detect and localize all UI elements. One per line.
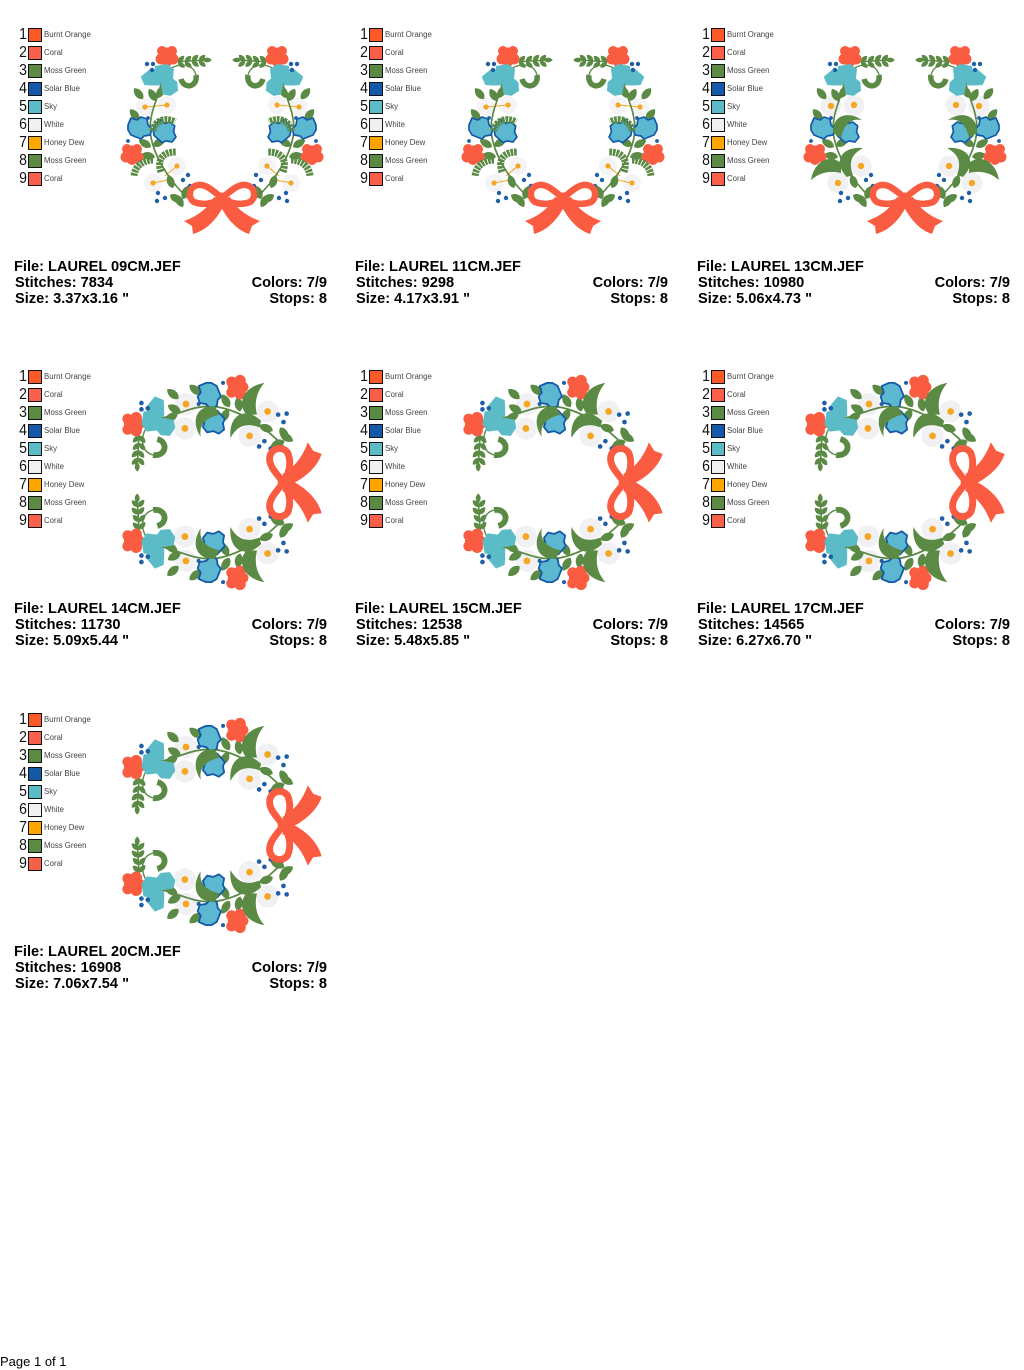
color legend: LAUREL 15CM bbox=[360, 368, 432, 529]
file details: LAUREL 20CM: File: LAUREL 20CM.JEF bbox=[14, 944, 181, 960]
color legend: LAUREL 15CM: 5 bbox=[360, 440, 368, 457]
color legend: LAUREL 20CM: 9 bbox=[19, 855, 27, 872]
color legend: LAUREL 20CM: Honey Dew bbox=[44, 823, 84, 832]
file details: LAUREL 11CM: Colors: 7/9 bbox=[593, 275, 668, 291]
panel: LAUREL 13CM bbox=[697, 26, 1010, 307]
color legend: LAUREL 11CM: Moss Green bbox=[385, 66, 427, 75]
color legend: LAUREL 15CM: Honey Dew bbox=[385, 480, 425, 489]
color legend: LAUREL 09CM: 6 bbox=[19, 116, 27, 133]
color legend: LAUREL 15CM: 6 bbox=[360, 458, 368, 475]
color legend: LAUREL 20CM: 7 bbox=[19, 819, 27, 836]
color legend: LAUREL 09CM: 2 bbox=[19, 44, 27, 61]
color legend: LAUREL 14CM: 7 bbox=[19, 476, 27, 493]
color legend: LAUREL 09CM: Sky bbox=[44, 102, 57, 111]
color legend: LAUREL 15CM: White bbox=[385, 462, 405, 471]
color legend: LAUREL 20CM: 3 bbox=[19, 747, 27, 764]
color legend: LAUREL 15CM: Burnt Orange bbox=[385, 372, 432, 381]
file details: LAUREL 17CM: File: LAUREL 17CM.JEF bbox=[697, 601, 864, 617]
color legend: LAUREL 17CM: 6 bbox=[702, 458, 710, 475]
color legend: LAUREL 15CM: 9 bbox=[360, 512, 368, 529]
color legend: LAUREL 14CM: White bbox=[44, 462, 64, 471]
color legend: LAUREL 17CM bbox=[702, 368, 774, 529]
color legend: LAUREL 11CM: 3 bbox=[360, 62, 368, 79]
file details: LAUREL 17CM: Stops: 8 bbox=[952, 633, 1010, 649]
color legend: LAUREL 20CM: Burnt Orange bbox=[44, 715, 91, 724]
color legend: LAUREL 20CM: 1 bbox=[19, 711, 27, 728]
file details: LAUREL 17CM: Colors: 7/9 bbox=[935, 617, 1010, 633]
color legend: LAUREL 09CM: Honey Dew bbox=[44, 138, 84, 147]
file details: LAUREL 20CM: Colors: 7/9 bbox=[252, 960, 327, 976]
color legend: LAUREL 13CM: Moss Green bbox=[727, 66, 769, 75]
color legend: LAUREL 15CM: Coral bbox=[385, 516, 404, 525]
color legend: LAUREL 15CM: 2 bbox=[360, 386, 368, 403]
color legend: LAUREL 13CM: 1 bbox=[702, 26, 710, 43]
file details: LAUREL 13CM: File: LAUREL 13CM.JEF bbox=[697, 259, 864, 275]
file details: LAUREL 17CM: Stitches: 14565 bbox=[698, 617, 804, 633]
color legend: LAUREL 09CM: 7 bbox=[19, 134, 27, 151]
color legend: LAUREL 13CM: Coral bbox=[727, 48, 746, 57]
color legend: LAUREL 13CM: 4 bbox=[702, 80, 710, 97]
color legend: LAUREL 11CM: Honey Dew bbox=[385, 138, 425, 147]
color legend: LAUREL 11CM: White bbox=[385, 120, 405, 129]
color legend: LAUREL 11CM: 4 bbox=[360, 80, 368, 97]
color legend: LAUREL 11CM: Sky bbox=[385, 102, 398, 111]
file details: LAUREL 09CM: Colors: 7/9 bbox=[252, 275, 327, 291]
color legend: LAUREL 13CM: 8 bbox=[702, 152, 710, 169]
file details: LAUREL 09CM: Size: 3.37x3.16 " bbox=[15, 291, 129, 307]
wreath: LAUREL 11CM bbox=[462, 46, 664, 234]
color legend: LAUREL 14CM: Moss Green bbox=[44, 408, 86, 417]
color legend: LAUREL 20CM: Moss Green bbox=[44, 751, 86, 760]
wreath: LAUREL 13CM bbox=[804, 46, 1006, 234]
file details: LAUREL 14CM: File: LAUREL 14CM.JEF bbox=[14, 601, 181, 617]
file details: LAUREL 15CM: Stops: 8 bbox=[610, 633, 668, 649]
color legend: LAUREL 09CM bbox=[19, 26, 91, 187]
file details: LAUREL 17CM: Size: 6.27x6.70 " bbox=[698, 633, 812, 649]
file details: LAUREL 11CM: Size: 4.17x3.91 " bbox=[356, 291, 470, 307]
color legend: LAUREL 11CM: 6 bbox=[360, 116, 368, 133]
color legend: LAUREL 17CM: Sky bbox=[727, 444, 740, 453]
color legend: LAUREL 13CM: 3 bbox=[702, 62, 710, 79]
file details: LAUREL 20CM: Stitches: 16908 bbox=[15, 960, 121, 976]
color legend: LAUREL 14CM: Burnt Orange bbox=[44, 372, 91, 381]
color legend: LAUREL 09CM: Coral bbox=[44, 48, 63, 57]
wreath: LAUREL 15CM bbox=[463, 374, 663, 590]
color legend: LAUREL 11CM: Moss Green bbox=[385, 156, 427, 165]
color legend: LAUREL 11CM: Coral bbox=[385, 174, 404, 183]
color legend: LAUREL 17CM: 2 bbox=[702, 386, 710, 403]
color legend: LAUREL 17CM: 1 bbox=[702, 368, 710, 385]
color legend: LAUREL 20CM: 2 bbox=[19, 729, 27, 746]
color legend: LAUREL 14CM: 1 bbox=[19, 368, 27, 385]
color legend: LAUREL 15CM: Moss Green bbox=[385, 408, 427, 417]
color legend: LAUREL 17CM: Coral bbox=[727, 516, 746, 525]
color legend: LAUREL 13CM: White bbox=[727, 120, 747, 129]
color legend: LAUREL 17CM: White bbox=[727, 462, 747, 471]
color legend: LAUREL 20CM bbox=[19, 711, 91, 872]
file details: LAUREL 11CM: File: LAUREL 11CM.JEF bbox=[355, 259, 521, 275]
file details: LAUREL 11CM: Stops: 8 bbox=[610, 291, 668, 307]
color legend: LAUREL 15CM: Sky bbox=[385, 444, 398, 453]
file details: LAUREL 09CM bbox=[14, 259, 327, 307]
file details: LAUREL 20CM: Stops: 8 bbox=[269, 976, 327, 992]
color legend: LAUREL 20CM: White bbox=[44, 805, 64, 814]
panel: LAUREL 15CM bbox=[355, 368, 668, 649]
color legend: LAUREL 14CM: Coral bbox=[44, 390, 63, 399]
color legend: LAUREL 15CM: Solar Blue bbox=[385, 426, 421, 435]
color legend: LAUREL 14CM: 6 bbox=[19, 458, 27, 475]
file details: LAUREL 15CM bbox=[355, 601, 668, 649]
color legend: LAUREL 17CM: Coral bbox=[727, 390, 746, 399]
color legend: LAUREL 13CM: Solar Blue bbox=[727, 84, 763, 93]
file details: LAUREL 09CM: Stitches: 7834 bbox=[15, 275, 113, 291]
panel: LAUREL 09CM bbox=[14, 26, 327, 307]
file details: LAUREL 09CM: File: LAUREL 09CM.JEF bbox=[14, 259, 181, 275]
color legend: LAUREL 11CM: Coral bbox=[385, 48, 404, 57]
color legend: LAUREL 11CM: 2 bbox=[360, 44, 368, 61]
file details: LAUREL 13CM: Colors: 7/9 bbox=[935, 275, 1010, 291]
color legend: LAUREL 13CM: Burnt Orange bbox=[727, 30, 774, 39]
color legend: LAUREL 20CM: 4 bbox=[19, 765, 27, 782]
color legend: LAUREL 14CM: 2 bbox=[19, 386, 27, 403]
color legend: LAUREL 09CM: White bbox=[44, 120, 64, 129]
color legend: LAUREL 17CM: 9 bbox=[702, 512, 710, 529]
color legend: LAUREL 17CM: Moss Green bbox=[727, 408, 769, 417]
file details: LAUREL 11CM bbox=[355, 259, 668, 307]
file details: LAUREL 14CM: Stitches: 11730 bbox=[15, 617, 120, 633]
color legend: LAUREL 15CM: 4 bbox=[360, 422, 368, 439]
color legend: LAUREL 14CM: 5 bbox=[19, 440, 27, 457]
color legend: LAUREL 15CM: 3 bbox=[360, 404, 368, 421]
color legend: LAUREL 14CM: Honey Dew bbox=[44, 480, 84, 489]
color legend: LAUREL 20CM: 8 bbox=[19, 837, 27, 854]
color legend: LAUREL 09CM: Moss Green bbox=[44, 156, 86, 165]
color legend: LAUREL 14CM: 4 bbox=[19, 422, 27, 439]
file details: LAUREL 15CM: Stitches: 12538 bbox=[356, 617, 462, 633]
file details: LAUREL 14CM: Size: 5.09x5.44 " bbox=[15, 633, 129, 649]
color legend: LAUREL 13CM: Sky bbox=[727, 102, 740, 111]
color legend: LAUREL 13CM: 2 bbox=[702, 44, 710, 61]
file details: LAUREL 20CM bbox=[14, 944, 327, 992]
color legend: LAUREL 11CM: 5 bbox=[360, 98, 368, 115]
color legend: LAUREL 15CM: Moss Green bbox=[385, 498, 427, 507]
color legend: LAUREL 14CM: 3 bbox=[19, 404, 27, 421]
color legend: LAUREL 14CM: 8 bbox=[19, 494, 27, 511]
color legend: LAUREL 13CM: 9 bbox=[702, 170, 710, 187]
color legend: LAUREL 11CM: 8 bbox=[360, 152, 368, 169]
file details: LAUREL 14CM: Stops: 8 bbox=[269, 633, 327, 649]
color legend: LAUREL 20CM: Coral bbox=[44, 859, 63, 868]
color legend: LAUREL 20CM: Sky bbox=[44, 787, 57, 796]
file details: LAUREL 15CM: File: LAUREL 15CM.JEF bbox=[355, 601, 522, 617]
color legend: LAUREL 09CM: 5 bbox=[19, 98, 27, 115]
color legend: LAUREL 20CM: 5 bbox=[19, 783, 27, 800]
file details: LAUREL 09CM: Stops: 8 bbox=[269, 291, 327, 307]
color legend: LAUREL 14CM: 9 bbox=[19, 512, 27, 529]
color legend: LAUREL 11CM: 9 bbox=[360, 170, 368, 187]
color legend: LAUREL 13CM: Coral bbox=[727, 174, 746, 183]
color legend: LAUREL 09CM: 8 bbox=[19, 152, 27, 169]
color legend: LAUREL 09CM: 1 bbox=[19, 26, 27, 43]
color legend: LAUREL 13CM: 6 bbox=[702, 116, 710, 133]
page footer: Page 1 of 1 bbox=[0, 1354, 66, 1369]
color legend: LAUREL 17CM: Honey Dew bbox=[727, 480, 767, 489]
color legend: LAUREL 17CM: 7 bbox=[702, 476, 710, 493]
color legend: LAUREL 17CM: 8 bbox=[702, 494, 710, 511]
color legend: LAUREL 14CM bbox=[19, 368, 91, 529]
file details: LAUREL 15CM: Size: 5.48x5.85 " bbox=[356, 633, 470, 649]
panel: LAUREL 20CM bbox=[14, 711, 327, 992]
color legend: LAUREL 17CM: Moss Green bbox=[727, 498, 769, 507]
color legend: LAUREL 13CM bbox=[702, 26, 774, 187]
file details: LAUREL 13CM: Stitches: 10980 bbox=[698, 275, 804, 291]
color legend: LAUREL 15CM: Coral bbox=[385, 390, 404, 399]
color legend: LAUREL 15CM: 1 bbox=[360, 368, 368, 385]
color legend: LAUREL 11CM: 1 bbox=[360, 26, 368, 43]
color legend: LAUREL 14CM: Moss Green bbox=[44, 498, 86, 507]
color legend: LAUREL 14CM: Solar Blue bbox=[44, 426, 80, 435]
color legend: LAUREL 20CM: 6 bbox=[19, 801, 27, 818]
wreath: LAUREL 14CM bbox=[122, 374, 322, 590]
color legend: LAUREL 17CM: 5 bbox=[702, 440, 710, 457]
color legend: LAUREL 09CM: Burnt Orange bbox=[44, 30, 91, 39]
panel: LAUREL 14CM bbox=[14, 368, 327, 649]
file details: LAUREL 11CM: Stitches: 9298 bbox=[356, 275, 454, 291]
color legend: LAUREL 13CM: 5 bbox=[702, 98, 710, 115]
color legend: LAUREL 17CM: 4 bbox=[702, 422, 710, 439]
color legend: LAUREL 11CM bbox=[360, 26, 432, 187]
file details: LAUREL 13CM: Stops: 8 bbox=[952, 291, 1010, 307]
color legend: LAUREL 20CM: Solar Blue bbox=[44, 769, 80, 778]
color legend: LAUREL 09CM: 3 bbox=[19, 62, 27, 79]
wreath: LAUREL 17CM bbox=[805, 374, 1005, 590]
color legend: LAUREL 11CM: Solar Blue bbox=[385, 84, 421, 93]
file details: LAUREL 17CM bbox=[697, 601, 1010, 649]
color legend: LAUREL 11CM: Burnt Orange bbox=[385, 30, 432, 39]
color legend: LAUREL 17CM: Burnt Orange bbox=[727, 372, 774, 381]
color legend: LAUREL 15CM: 8 bbox=[360, 494, 368, 511]
color legend: LAUREL 09CM: Moss Green bbox=[44, 66, 86, 75]
wreath: LAUREL 09CM bbox=[120, 46, 324, 234]
color legend: LAUREL 09CM: Solar Blue bbox=[44, 84, 80, 93]
color legend: LAUREL 13CM: Honey Dew bbox=[727, 138, 767, 147]
color legend: LAUREL 17CM: Solar Blue bbox=[727, 426, 763, 435]
file details: LAUREL 13CM: Size: 5.06x4.73 " bbox=[698, 291, 812, 307]
color legend: LAUREL 15CM: 7 bbox=[360, 476, 368, 493]
color legend: LAUREL 09CM: 9 bbox=[19, 170, 27, 187]
file details: LAUREL 14CM: Colors: 7/9 bbox=[252, 617, 327, 633]
panel: LAUREL 17CM bbox=[697, 368, 1010, 649]
file details: LAUREL 14CM bbox=[14, 601, 327, 649]
file details: LAUREL 13CM bbox=[697, 259, 1010, 307]
color legend: LAUREL 09CM: 4 bbox=[19, 80, 27, 97]
color legend: LAUREL 13CM: Moss Green bbox=[727, 156, 769, 165]
file details: LAUREL 20CM: Size: 7.06x7.54 " bbox=[15, 976, 129, 992]
color legend: LAUREL 20CM: Moss Green bbox=[44, 841, 86, 850]
panel: LAUREL 11CM bbox=[355, 26, 668, 307]
color legend: LAUREL 17CM: 3 bbox=[702, 404, 710, 421]
file details: LAUREL 15CM: Colors: 7/9 bbox=[593, 617, 668, 633]
color legend: LAUREL 14CM: Sky bbox=[44, 444, 57, 453]
color legend: LAUREL 09CM: Coral bbox=[44, 174, 63, 183]
color legend: LAUREL 14CM: Coral bbox=[44, 516, 63, 525]
color legend: LAUREL 13CM: 7 bbox=[702, 134, 710, 151]
wreath: LAUREL 20CM bbox=[122, 718, 322, 934]
color legend: LAUREL 11CM: 7 bbox=[360, 134, 368, 151]
color legend: LAUREL 20CM: Coral bbox=[44, 733, 63, 742]
